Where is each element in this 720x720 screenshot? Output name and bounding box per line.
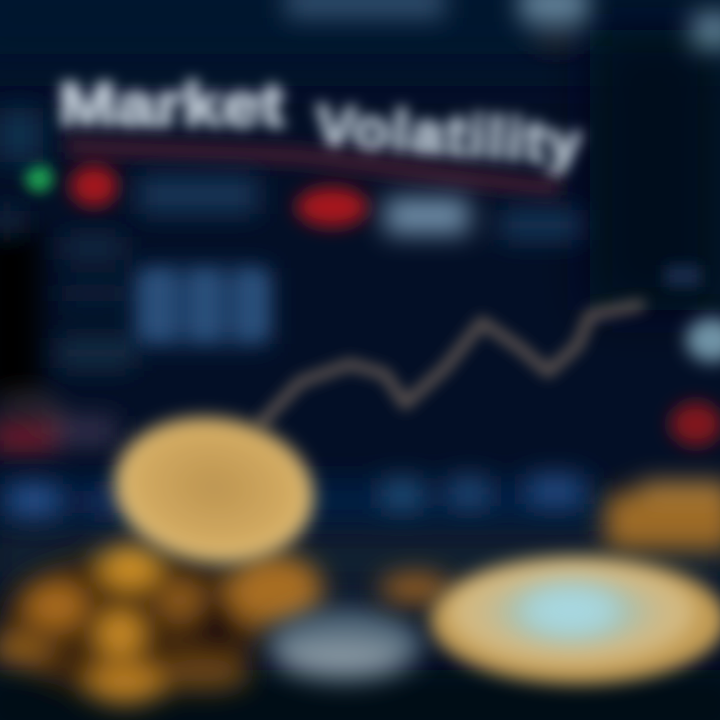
line chart: [262, 305, 640, 422]
title: Market Volatility: Volatility: [313, 92, 584, 178]
icon: red indicator left: [70, 165, 118, 207]
ticker row: [0, 164, 580, 240]
icon: stacked coins right: [605, 482, 720, 550]
bottom ticker row: [0, 474, 600, 522]
table columns: [142, 272, 266, 338]
icon: large pale coin: [430, 556, 720, 684]
title underline: [65, 146, 560, 190]
left red strip: [0, 400, 117, 452]
coin highlight: [522, 586, 618, 634]
icon: large gold coin: [105, 405, 323, 575]
right side labels: [665, 265, 720, 446]
coin pile: [0, 544, 323, 704]
data table: [0, 108, 270, 368]
icon: silver coin: [267, 609, 423, 681]
top blurred labels: [285, 0, 720, 48]
ticker text blocks: [0, 176, 580, 240]
icon: red indicator centre: [296, 187, 368, 227]
title: Market Volatility: [58, 71, 584, 178]
title: Market Volatility: Market: [58, 71, 284, 140]
gold fragment: [379, 572, 451, 604]
icon: green indicator: [25, 164, 53, 192]
